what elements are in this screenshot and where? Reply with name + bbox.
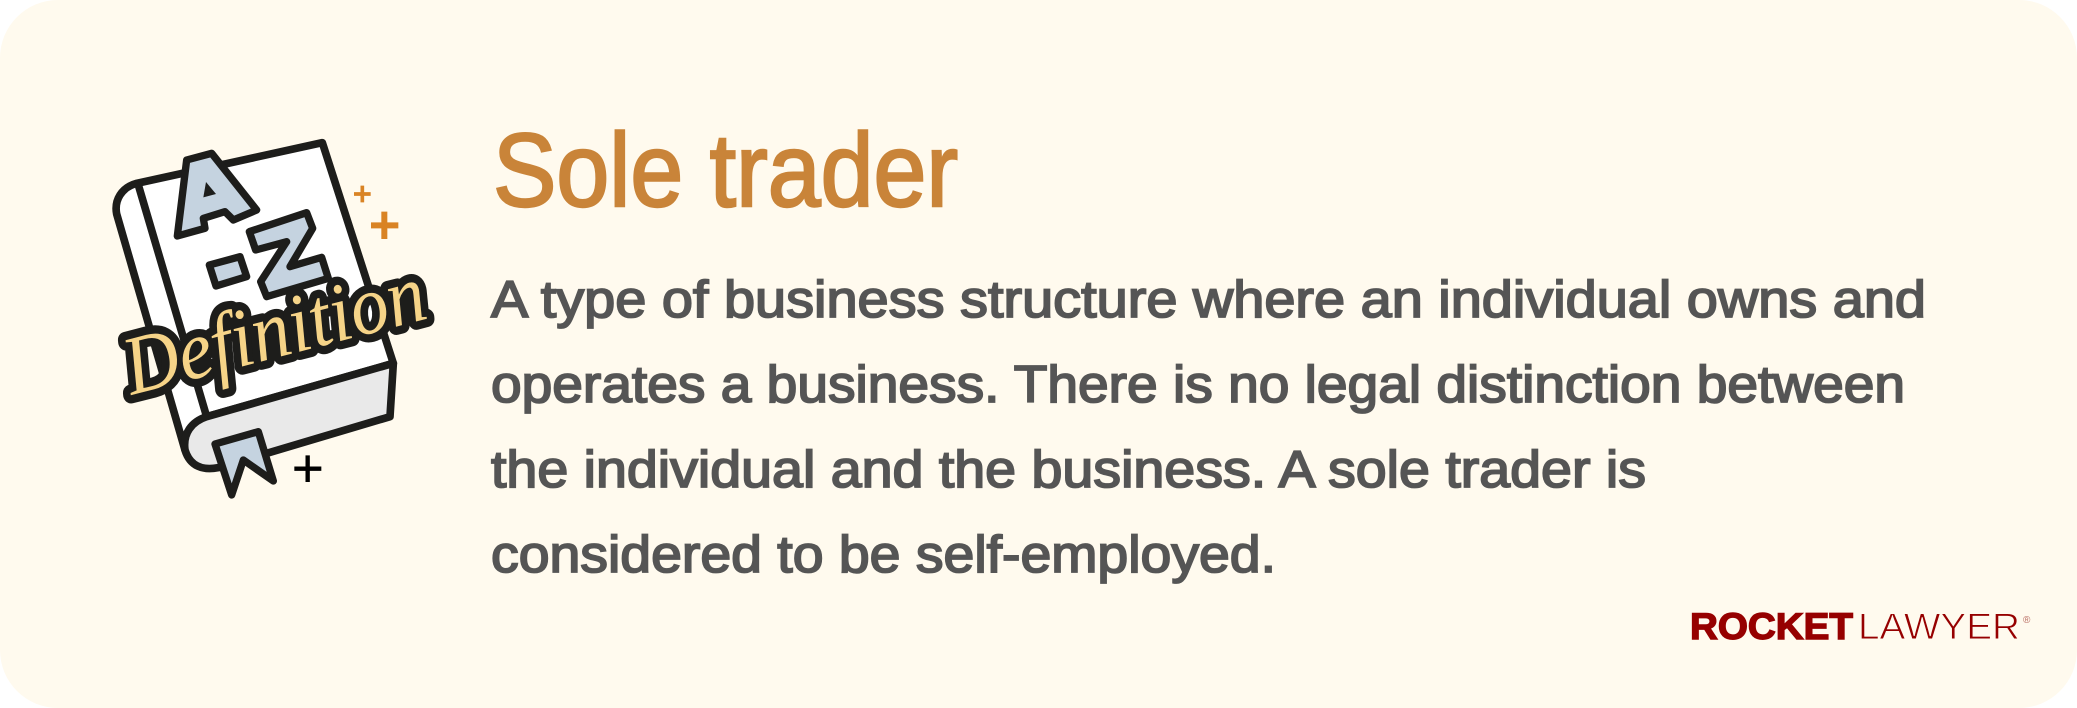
black plus [294,455,321,482]
large orange plus [371,212,398,239]
title: Sole trader [493,113,958,229]
book spine line [138,185,207,417]
logo word ROCKET: ROCKET [1690,606,1853,647]
book pages [185,363,393,469]
Definition script label: Definition [113,247,435,414]
icon: A-Z definition book [113,143,435,495]
bookmark [215,432,273,495]
dash [209,257,247,286]
line 2: operates a business. There is no legal distinction between [491,356,1905,414]
definition text block [491,271,1926,584]
logo: Rocket Lawyer [1690,606,2031,647]
small orange plus [354,186,371,202]
logo word LAWYER: LAWYER [1858,606,2020,647]
registered mark: ® [2023,615,2031,626]
line 4: considered to be self-employed. [491,526,1276,584]
letter A counter [203,182,216,197]
line 3: the individual and the business. A sole trader is [491,441,1646,499]
line 1: A type of business structure where an individual owns and [491,271,1926,329]
letter A [177,153,257,236]
book cover [116,143,393,450]
letter Z [249,213,328,297]
